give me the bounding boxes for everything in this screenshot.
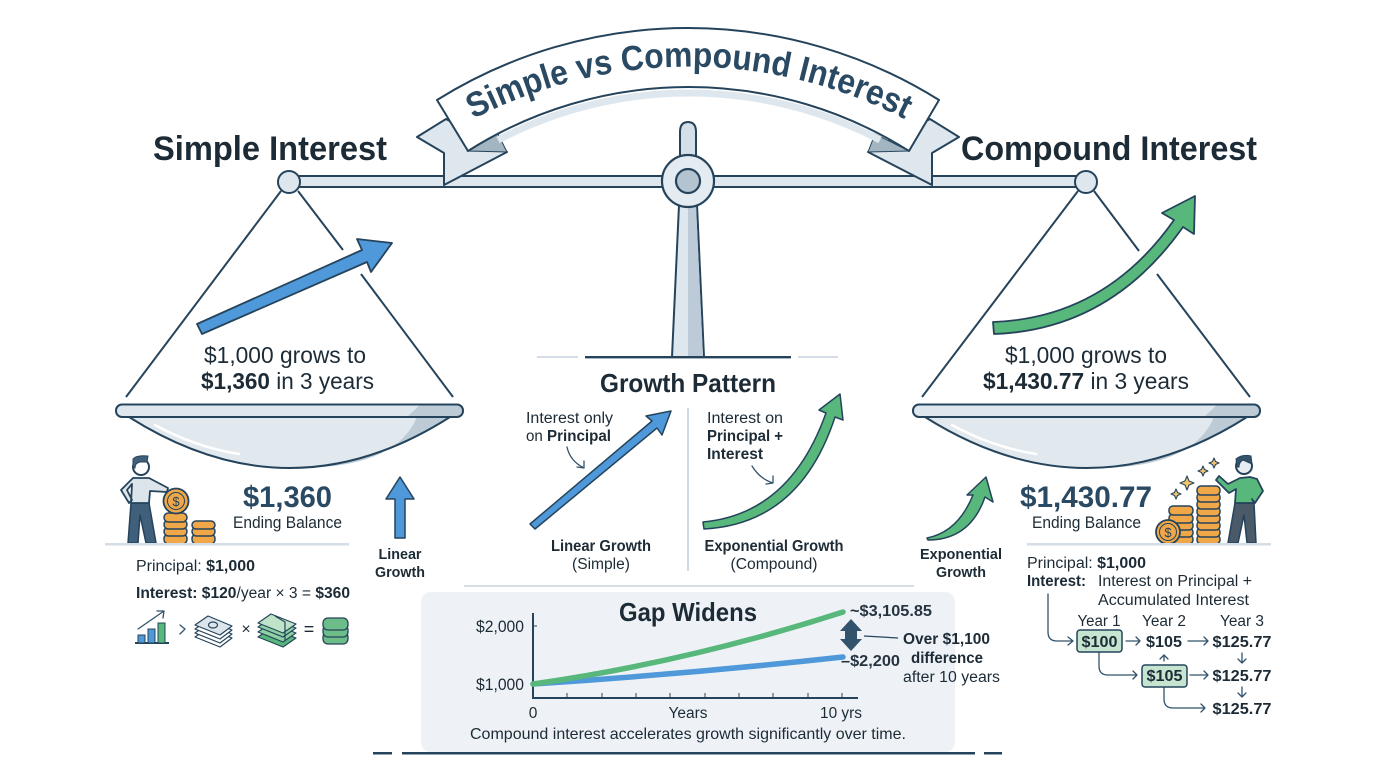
person head	[1236, 455, 1252, 474]
person torso and arms	[1216, 476, 1263, 503]
note: interest on principal plus interest: Principal +	[707, 428, 783, 445]
icon: person with coins	[121, 456, 215, 544]
bowl	[129, 417, 450, 468]
text: compound summary	[983, 342, 1189, 394]
note: interest on principal plus interest: Interest	[707, 446, 763, 463]
label: exponential growth: Exponential	[920, 546, 1002, 563]
note: interest on principal plus interest: Interest on	[707, 410, 783, 427]
callout: difference	[903, 631, 1000, 686]
label: linear growth: Growth	[375, 564, 425, 581]
year labels: Year 3	[1220, 613, 1264, 630]
central post	[672, 122, 704, 357]
panel: growth pattern	[526, 368, 844, 573]
panel: gap widens	[421, 592, 1000, 752]
person legs	[128, 503, 156, 543]
year labels: Year 2	[1142, 613, 1186, 630]
label: linear growth	[375, 546, 425, 581]
callout leader	[864, 636, 898, 638]
ending balance	[1020, 481, 1152, 532]
bowl	[925, 417, 1247, 468]
box: year 1 $100: $100	[1082, 634, 1118, 651]
interest text: Interest on Principal +	[1098, 573, 1252, 590]
note: interest on principal plus interest	[707, 410, 783, 484]
person torso and arms	[121, 478, 168, 503]
title ribbon banner	[416, 27, 960, 186]
heading: compound interest: Compound Interest	[961, 130, 1257, 168]
ending balance: Ending Balance	[1032, 514, 1141, 532]
axis labels: 0	[529, 705, 538, 722]
values: $125.77	[1212, 668, 1272, 685]
pan strings	[922, 191, 1250, 397]
ending balance: $1,360	[243, 481, 332, 514]
icon: green cash stack	[258, 614, 296, 647]
pan strings	[126, 191, 453, 397]
icon: double arrow	[840, 619, 862, 651]
callout: difference: Over $1,100	[903, 631, 990, 648]
icon: bar chart	[135, 611, 169, 643]
label: exponential growth compound	[704, 538, 844, 573]
axis labels: $2,000	[476, 618, 524, 636]
icon: green database stack	[323, 618, 348, 644]
icon: chevron	[180, 625, 185, 634]
ribbon body	[437, 28, 939, 151]
panel: simple interest details	[105, 456, 350, 647]
multiply sign: ×	[241, 621, 251, 638]
hub	[662, 155, 714, 207]
person head	[133, 456, 149, 475]
callout: difference: difference	[911, 650, 983, 667]
beam	[289, 176, 1086, 187]
note: interest only on principal: on Principal	[526, 428, 611, 445]
equals sign: =	[304, 619, 314, 639]
arrow: exponential growth	[927, 477, 993, 540]
note: interest only on principal: Interest only	[526, 410, 613, 427]
icon: person with coins and sparkles	[1156, 455, 1263, 544]
interest text: Accumulated Interest	[1098, 592, 1250, 609]
arrow: simple growth	[197, 239, 392, 334]
label: linear growth simple	[551, 538, 651, 573]
label: exponential growth	[920, 546, 1002, 581]
rim	[116, 404, 463, 417]
compounding flow diagram	[1048, 594, 1272, 718]
year labels	[1078, 613, 1264, 630]
callout: difference: after 10 years	[903, 669, 1000, 686]
exponential arrow	[703, 394, 843, 529]
principal text: Principal: $1,000	[136, 558, 255, 575]
green series	[533, 612, 843, 684]
box: year 1 $100	[1077, 630, 1122, 652]
heading: gap widens: Gap Widens	[619, 597, 757, 627]
title: Simple vs Compound Interest	[466, 46, 912, 119]
heading: simple interest: Simple Interest	[153, 130, 387, 168]
text: simple summary: $1,360 in 3 years	[201, 368, 374, 394]
rim	[913, 404, 1260, 417]
ending balance	[233, 481, 342, 532]
value: compound: ~$3,105.85	[850, 603, 932, 620]
year labels: Year 1	[1078, 613, 1120, 630]
label: linear growth simple: (Simple)	[572, 556, 630, 573]
scale: beam and central post	[289, 122, 1086, 358]
arrow: compound growth	[993, 196, 1195, 334]
label: linear growth: Linear	[378, 546, 422, 563]
line chart	[476, 612, 862, 722]
arrow: linear growth up	[386, 477, 414, 538]
panel: compound interest details	[1020, 455, 1272, 718]
dollar coin: $	[172, 494, 180, 509]
note: interest only on principal	[526, 410, 613, 468]
values: $105	[1146, 634, 1182, 651]
dollar coin: $	[1164, 525, 1172, 540]
interest formula: Interest: $120/year × 3 = $360	[136, 585, 350, 602]
values: $125.77	[1212, 634, 1272, 651]
tall coin stack	[1197, 486, 1220, 544]
left scale pan	[116, 171, 463, 468]
axes	[533, 613, 858, 698]
axis labels: Years	[668, 705, 708, 722]
principal text: Principal: $1,000	[1027, 555, 1146, 572]
caption: Compound interest accelerates growth significantly over time.	[470, 726, 906, 743]
value: simple: –$2,200	[841, 653, 900, 670]
text: compound summary: $1,430.77 in 3 years	[983, 368, 1189, 394]
icon row	[135, 611, 348, 647]
axis labels: $1,000	[476, 676, 524, 694]
pivot	[1075, 171, 1097, 193]
coin stack tall	[164, 513, 187, 544]
person legs	[1228, 503, 1256, 543]
label: exponential growth compound: Exponential Growth	[704, 538, 844, 555]
values: $125.77	[1212, 701, 1272, 718]
label: exponential growth compound: (Compound)	[730, 556, 818, 573]
axis labels: 10 yrs	[820, 705, 862, 722]
short coin stack	[1169, 506, 1193, 544]
label: linear growth simple: Linear Growth	[551, 538, 651, 555]
divider	[687, 408, 689, 571]
text: compound summary: $1,000 grows to	[1005, 342, 1167, 368]
ending balance: $1,430.77	[1020, 481, 1152, 514]
blue series	[533, 657, 843, 684]
ribbon left tail	[417, 119, 507, 185]
box: year 2 $105: $105	[1146, 668, 1183, 685]
panel background	[421, 592, 955, 752]
pivot	[278, 171, 300, 193]
linear arrow	[530, 411, 671, 529]
coin stack short	[192, 521, 215, 544]
interest text: Interest:	[1027, 573, 1086, 590]
icon: cash stack	[195, 616, 232, 647]
axis labels	[476, 618, 862, 722]
sparkles	[1171, 458, 1219, 499]
connector arrows	[1048, 594, 1246, 712]
label: exponential growth: Growth	[936, 564, 986, 581]
heading: growth pattern: Growth Pattern	[600, 368, 776, 398]
values	[1146, 634, 1272, 718]
interest text	[1027, 573, 1252, 609]
box: year 2 $105	[1142, 665, 1187, 687]
text: simple summary	[201, 342, 374, 394]
ribbon right tail	[868, 119, 959, 185]
ending balance: Ending Balance	[233, 514, 342, 532]
right scale pan	[913, 171, 1260, 468]
text: simple summary: $1,000 grows to	[204, 342, 366, 368]
